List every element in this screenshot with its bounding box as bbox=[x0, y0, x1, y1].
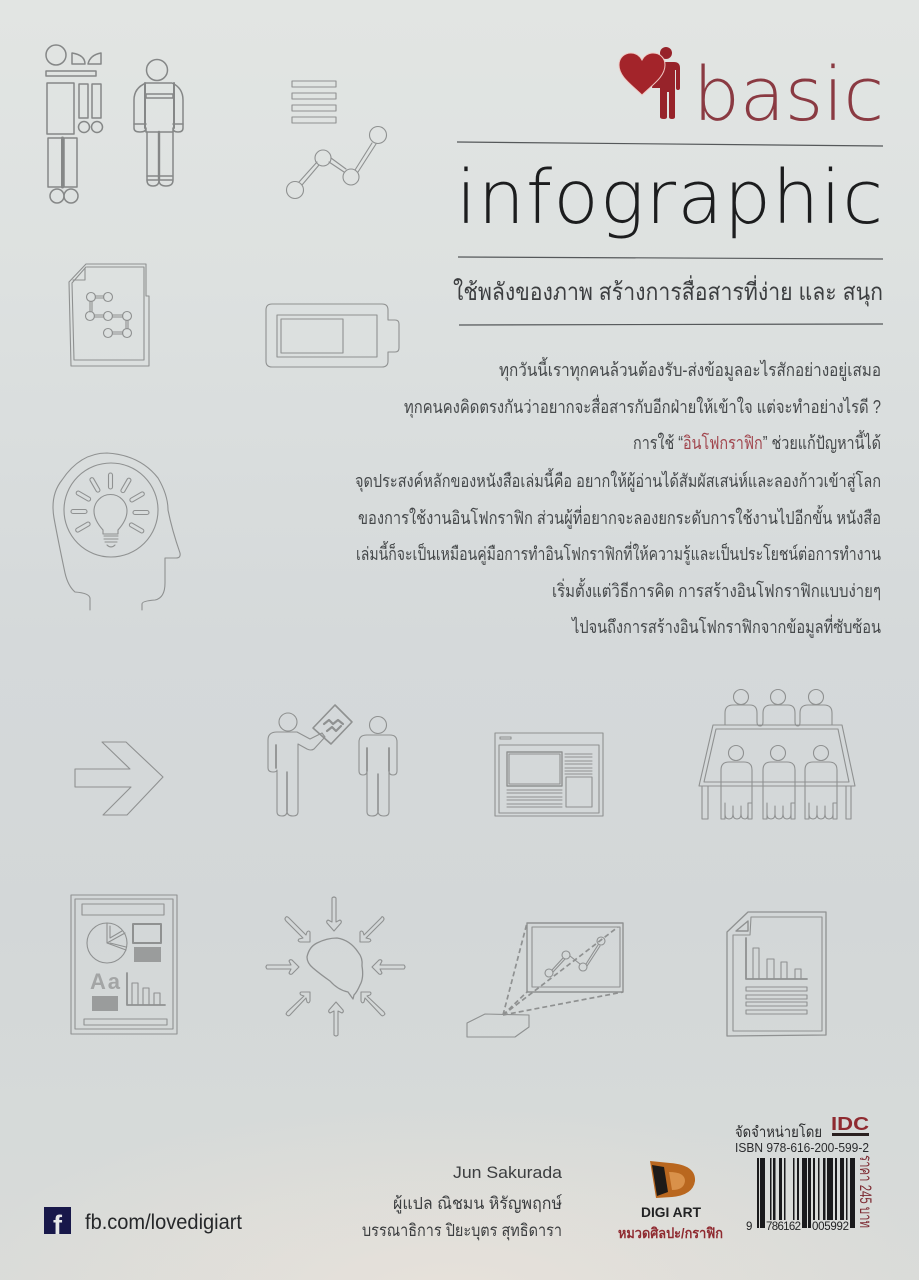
icon: battery bbox=[266, 304, 399, 367]
body text bbox=[355, 357, 881, 638]
icon: document with bar chart bbox=[727, 912, 826, 1036]
publisher name: DIGI ART bbox=[641, 1204, 701, 1220]
author credits: Jun Sakurada bbox=[453, 1163, 563, 1182]
facebook icon: f bbox=[53, 1210, 63, 1240]
icon: meeting table bbox=[699, 690, 855, 819]
icon: head with light bulb bbox=[53, 453, 180, 610]
facebook address: fb.com/lovedigiart bbox=[85, 1211, 242, 1234]
barcode: 005992 bbox=[812, 1221, 849, 1233]
barcode: 9 bbox=[746, 1221, 752, 1233]
rule under basic bbox=[457, 142, 883, 146]
icon: body parts bbox=[46, 45, 102, 203]
barcode bbox=[746, 1158, 855, 1233]
icon: projector and screen bbox=[467, 923, 623, 1037]
author credits: ผู้แปล ณิชมน หิรัญพฤกษ์ bbox=[393, 1194, 562, 1214]
icon: web page layout bbox=[495, 733, 603, 816]
barcode: 786162 bbox=[766, 1221, 801, 1233]
rule under infographic bbox=[458, 257, 883, 259]
author credits bbox=[362, 1163, 563, 1241]
category label: หมวดศิลปะ/กราฟิก bbox=[618, 1225, 723, 1241]
distributor bbox=[735, 1114, 869, 1141]
heading: basic: basic bbox=[693, 52, 884, 138]
distributor: จัดจำหน่ายโดย bbox=[735, 1123, 822, 1141]
icon: text lines bbox=[292, 81, 336, 123]
body text: การใช้ “อินโฟกราฟิก” ช่วยแก้ปัญหานี้ได้ bbox=[633, 430, 881, 453]
price: ราคา 245 บาท bbox=[856, 1155, 875, 1228]
rule under subtitle bbox=[459, 324, 883, 325]
icon: brain with arrows bbox=[266, 897, 405, 1036]
icon: arrow bbox=[75, 742, 163, 815]
icon: infographic poster: Aa bbox=[90, 969, 121, 994]
distributor: IDC bbox=[831, 1114, 869, 1134]
icon: presenter and listener bbox=[268, 705, 397, 816]
icon: infographic poster bbox=[71, 895, 177, 1034]
icon: line chart bbox=[286, 126, 386, 198]
icon: assembled person bbox=[134, 60, 183, 186]
ISBN: ISBN 978-616-200-599-2 bbox=[735, 1141, 869, 1155]
logo: heart and person bbox=[619, 47, 680, 119]
facebook icon bbox=[44, 1207, 71, 1240]
heading: infographic: infographic bbox=[456, 155, 883, 241]
publisher logo: Digi Art bbox=[650, 1161, 695, 1198]
icon: document with flow diagram bbox=[69, 264, 149, 366]
author credits: บรรณาธิการ ปิยะบุตร สุทธิดารา bbox=[362, 1221, 562, 1241]
